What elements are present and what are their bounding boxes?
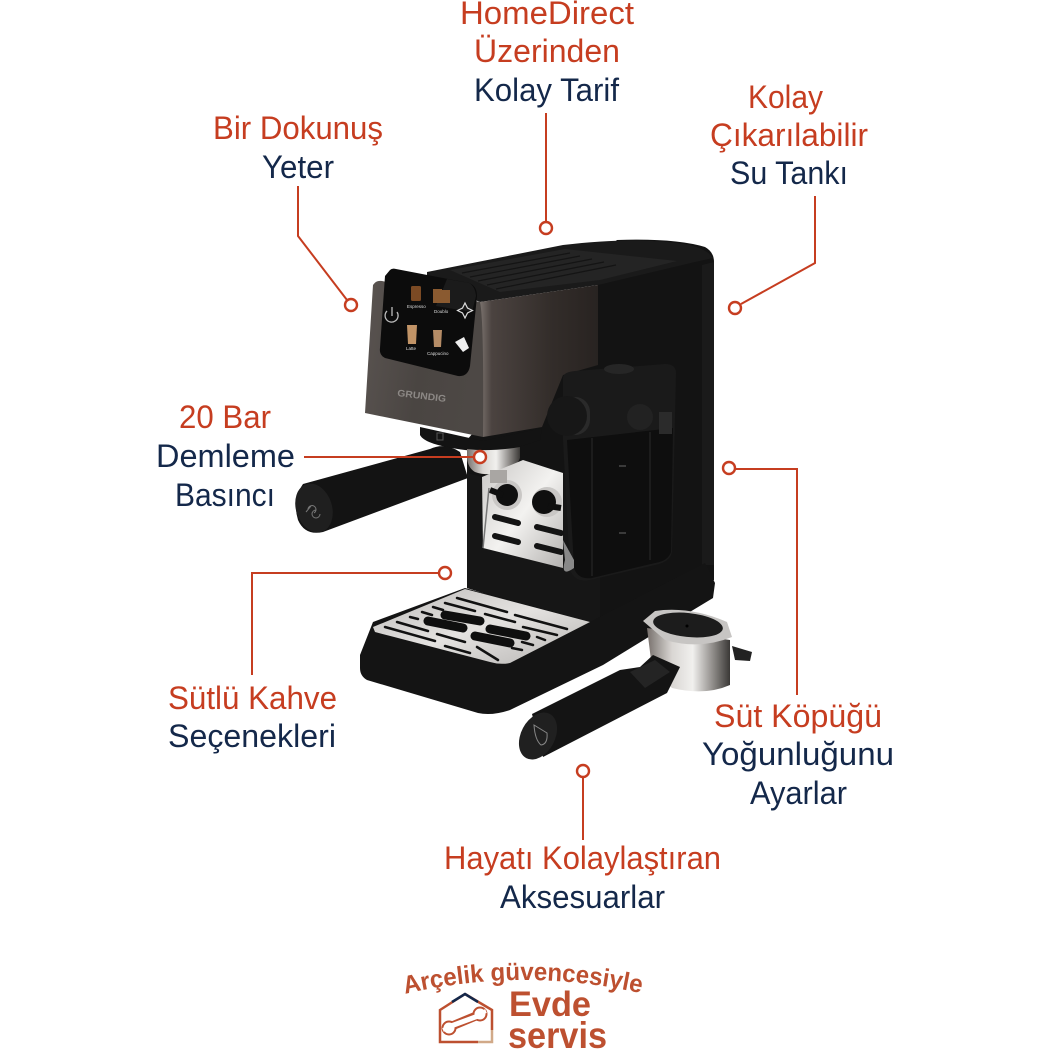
- callout: Su Tankı: [710, 79, 868, 314]
- callout: Hayatı Kolaylaştıran: [444, 765, 721, 915]
- machine head side panel: [480, 285, 598, 437]
- clean icon: [458, 303, 472, 318]
- logo house icon: [440, 994, 492, 1042]
- espresso cup: [411, 286, 421, 301]
- callout: Su Tankı: Su Tankı: [730, 155, 848, 191]
- callout: HomeDirect: Kolay Tarif: [474, 72, 619, 108]
- callout: Sütlü Kahve: Sütlü Kahve: [168, 680, 337, 716]
- screen labels: [406, 304, 449, 356]
- left portafilter basket: [467, 447, 520, 474]
- callout: Bir Dokunuş: [213, 110, 383, 311]
- double cups: [433, 289, 450, 303]
- control touch screen: [380, 269, 477, 376]
- callout: Süt Köpüğü: [702, 462, 894, 811]
- screen labels: Espresso: [407, 304, 426, 309]
- screen labels: Cappucino: [427, 351, 449, 356]
- right side window strip: [702, 262, 714, 565]
- steel splash plate: [482, 460, 563, 568]
- callout: Sütlü Kahve: Seçenekleri: [168, 718, 336, 754]
- callout: 20 Bar: [156, 399, 486, 513]
- callout: Bir Dokunuş: Yeter: [262, 149, 334, 185]
- callout: HomeDirect: [460, 0, 634, 234]
- callout: HomeDirect: Üzerinden: [474, 33, 620, 69]
- callout: Süt Köpüğü: Yoğunluğunu: [702, 736, 894, 772]
- logo curved tagline: Arçelik güvencesiyle: [406, 962, 642, 994]
- callout: 20 Bar: 20 Bar: [179, 399, 271, 435]
- milk tank: [563, 364, 676, 581]
- left portafilter handle: [289, 446, 468, 537]
- machine head front panel: [365, 281, 483, 437]
- lower tower: [467, 440, 600, 625]
- drip tray: [373, 589, 590, 664]
- callout: Hayatı Kolaylaştıran: Aksesuarlar: [500, 879, 665, 915]
- right portafilter: [511, 609, 752, 766]
- screen labels: Latte: [406, 346, 417, 351]
- callout: Süt Köpüğü: Ayarlar: [750, 775, 847, 811]
- callout: Bir Dokunuş: Bir Dokunuş: [213, 110, 383, 146]
- logo wordmark: Evde: [509, 985, 591, 1024]
- coffee machine: [289, 240, 752, 766]
- screen labels: Doublo: [434, 309, 449, 314]
- descaling icon: [455, 337, 469, 352]
- callout: Hayatı Kolaylaştıran: Hayatı Kolaylaştıran: [444, 840, 721, 876]
- machine tower: [467, 240, 714, 630]
- callout: Süt Köpüğü: Süt Köpüğü: [714, 698, 882, 734]
- cappuccino cup: [433, 330, 442, 347]
- callout: Su Tankı: Kolay: [748, 79, 823, 115]
- callout: Su Tankı: Çıkarılabilir: [710, 117, 868, 153]
- top lid grille: [427, 240, 713, 302]
- callout: Sütlü Kahve: [168, 567, 451, 754]
- callout: 20 Bar: Demleme: [156, 438, 295, 474]
- power icon: [385, 307, 398, 322]
- machine base: [360, 563, 715, 714]
- callout: 20 Bar: Basıncı: [175, 477, 275, 513]
- lock icon: [437, 433, 443, 440]
- logo: Evde servis: [406, 962, 642, 1050]
- steam knob: [547, 396, 590, 436]
- latte cup: [407, 325, 417, 344]
- brand name: GRUNDIG: [397, 388, 447, 405]
- group head collar: [420, 427, 542, 451]
- steel nozzle: [490, 470, 507, 483]
